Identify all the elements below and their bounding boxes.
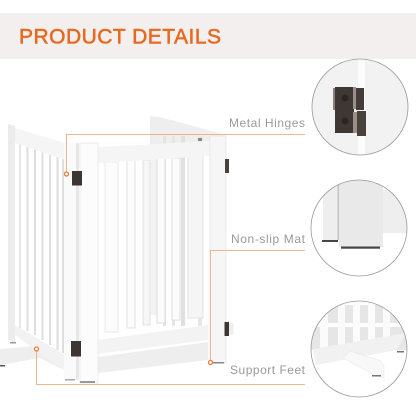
hinge: left lower — [71, 341, 81, 356]
hinge: left upper — [72, 171, 82, 186]
hinge: right lower — [224, 322, 234, 336]
left panel — [8, 124, 79, 380]
hinge: right upper — [225, 159, 229, 173]
header band — [0, 13, 416, 59]
callout: metal hinges — [64, 116, 305, 176]
detail circle: hinge — [312, 58, 408, 156]
detail circle: support feet — [310, 300, 408, 398]
label: support feet: Support Feet — [230, 363, 306, 377]
detail circle: non-slip mat — [310, 180, 408, 276]
title: PRODUCT DETAILS — [19, 26, 221, 48]
white pet gate illustration — [0, 116, 234, 383]
callout: support feet — [34, 347, 306, 384]
rear panel — [150, 116, 226, 326]
support foot — [0, 346, 64, 370]
callout: non-slip mat — [208, 232, 306, 364]
label: non-slip mat: Non-slip Mat — [231, 232, 306, 246]
label: metal hinges: Metal Hinges — [229, 116, 305, 130]
centre panel — [80, 136, 226, 383]
